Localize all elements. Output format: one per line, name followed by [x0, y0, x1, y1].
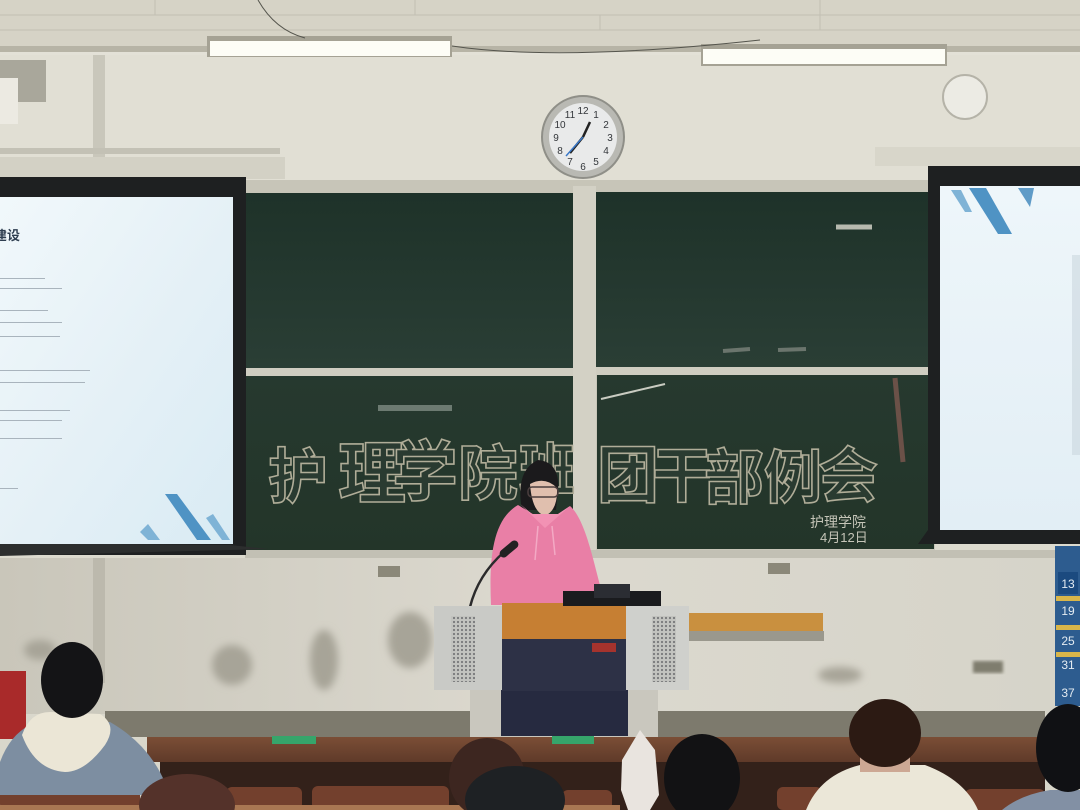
- blackboard heading: 部: [704, 445, 764, 512]
- wall calendar strip: 25: [1061, 634, 1075, 648]
- wall clock: 4: [603, 146, 609, 157]
- blackboard heading: 院: [458, 441, 518, 508]
- chalk signature: 4月12日: [820, 530, 868, 545]
- lectern: [434, 584, 689, 738]
- blackboard heading: 学: [392, 435, 458, 509]
- student: right in white shirt: [806, 699, 978, 810]
- blackboard: lower right panel: [597, 375, 934, 549]
- wall clock: 11: [565, 110, 576, 121]
- wall calendar strip: 19: [1061, 604, 1075, 618]
- right projection screen: [918, 166, 1080, 544]
- light: left tube: [207, 36, 452, 57]
- slide accent stripes: [951, 188, 1034, 234]
- left projection screen: [0, 177, 268, 556]
- wall calendar strip: 13: [1061, 577, 1075, 591]
- blackboard frame: [245, 180, 935, 560]
- wall clock: 5: [593, 157, 599, 168]
- blackboard heading: 护: [268, 444, 328, 511]
- wall calendar strip: [1055, 546, 1080, 706]
- front desks: [0, 736, 1045, 810]
- wall clock: 8: [557, 146, 563, 157]
- upper wall details: [0, 55, 1080, 180]
- blackboard heading: 班: [519, 439, 575, 502]
- light: right tube: [701, 44, 947, 66]
- presenter in pink hoodie: [490, 460, 602, 605]
- blackboard: lower left panel: [241, 376, 573, 550]
- wall calendar strip: 31: [1061, 658, 1075, 672]
- wall clock: 9: [553, 133, 559, 144]
- wall clock: 3: [607, 133, 613, 144]
- student: far right: [1002, 704, 1080, 810]
- blackboard heading: 例: [764, 446, 822, 511]
- microphone head: [498, 539, 520, 559]
- wall clock: [542, 96, 624, 178]
- blackboard tray edges: [241, 186, 1060, 559]
- laptop on lectern: [563, 591, 661, 606]
- blackboard heading: 干: [652, 443, 712, 510]
- ceiling with light fixtures: [0, 0, 1080, 66]
- wall clock: 2: [603, 120, 609, 131]
- wall clock: 10: [554, 120, 566, 131]
- wall clock: 6: [580, 162, 586, 173]
- chalk signature: [810, 514, 868, 545]
- microphone: [470, 552, 504, 607]
- blackboard heading: 理: [338, 437, 406, 513]
- blackboard heading: 会: [818, 443, 878, 510]
- red box at left: [0, 671, 26, 739]
- wall calendar strip: 37: [1061, 686, 1075, 700]
- student left: hoodie and dark hair: [0, 642, 166, 795]
- water bottle: [621, 730, 659, 810]
- lower wall: [0, 558, 1060, 737]
- blackboard heading: 团: [597, 442, 659, 511]
- student: lower left head: [139, 774, 235, 810]
- wall clock: 1: [593, 110, 599, 121]
- side desk shelf: [688, 613, 824, 641]
- student: center right head: [664, 734, 740, 810]
- wall clock: 7: [567, 157, 573, 168]
- chalk marks: [378, 227, 903, 462]
- slide accent stripes: [140, 494, 230, 540]
- chalk signature: 护理学院: [810, 514, 866, 530]
- wall clock: 12: [577, 106, 589, 117]
- student: center heads: [449, 738, 565, 810]
- blackboard: upper right panel: [596, 192, 934, 367]
- blackboard heading: [268, 435, 878, 513]
- blackboard: upper left panel: [241, 193, 573, 368]
